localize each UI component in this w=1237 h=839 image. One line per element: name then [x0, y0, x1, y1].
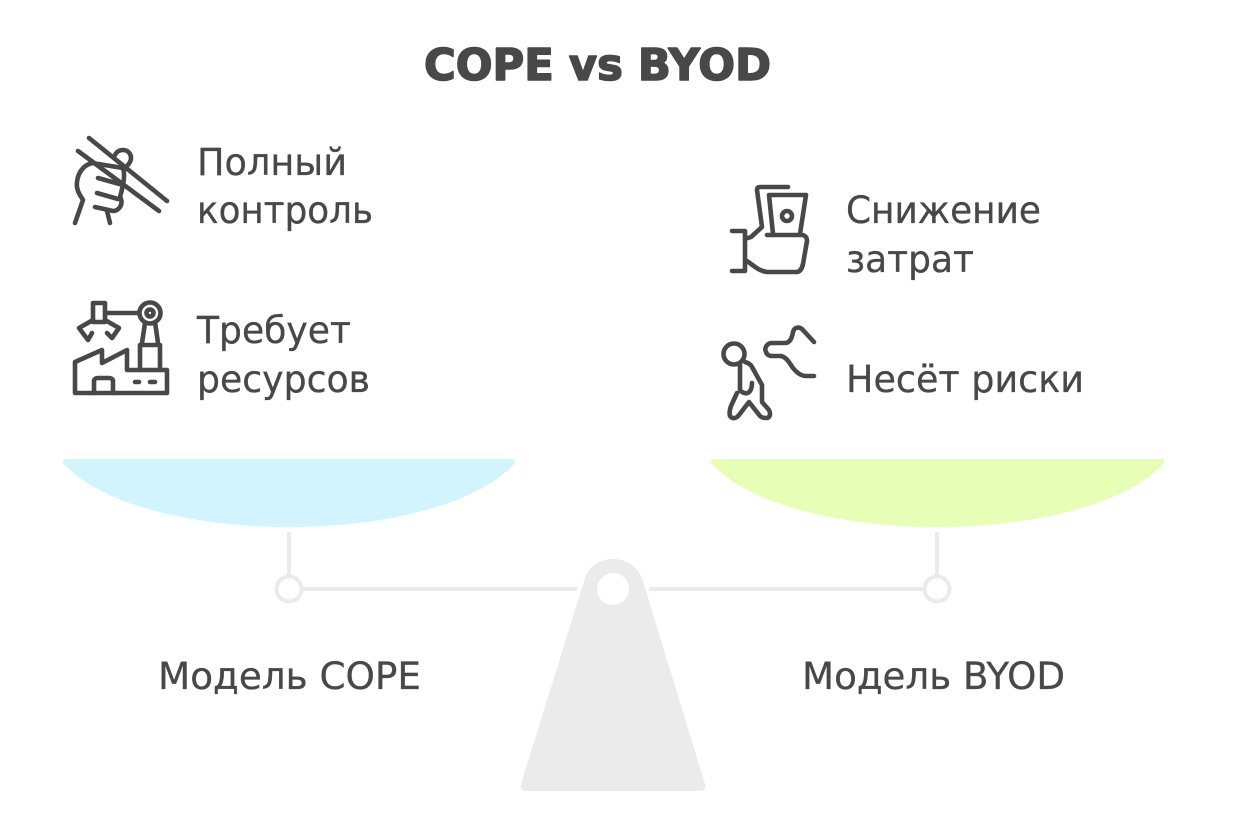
- panel: right BYOD items: [724, 187, 1084, 418]
- scale beam and hangers: [276, 532, 950, 602]
- icon: factory with robotic arm: [75, 302, 167, 393]
- icon: hand holding money: [732, 187, 807, 272]
- text: full control: Полный: [197, 141, 347, 184]
- title: COPE vs BYOD: [424, 40, 771, 91]
- scale fulcrum: [521, 559, 705, 791]
- text: requires resources: [196, 309, 370, 401]
- icon: person walking on a risky path: [724, 328, 814, 418]
- text: cost reduction: Снижение: [846, 189, 1041, 232]
- text: requires resources: Требует: [196, 309, 351, 352]
- icon: hand holding sticks: [75, 138, 167, 223]
- panel: left COPE items: [75, 138, 373, 401]
- label: COPE model: Модель COPE: [158, 655, 421, 698]
- label: BYOD model: Модель BYOD: [802, 655, 1065, 698]
- text: full control: контроль: [197, 189, 373, 232]
- text: cost reduction: [846, 189, 1041, 281]
- text: full control: [197, 141, 373, 232]
- scale pan: COPE: [63, 459, 515, 527]
- scale pan: BYOD: [711, 459, 1164, 527]
- text: carries risks: Несёт риски: [846, 358, 1084, 401]
- text: cost reduction: затрат: [846, 238, 974, 281]
- text: requires resources: ресурсов: [197, 358, 370, 401]
